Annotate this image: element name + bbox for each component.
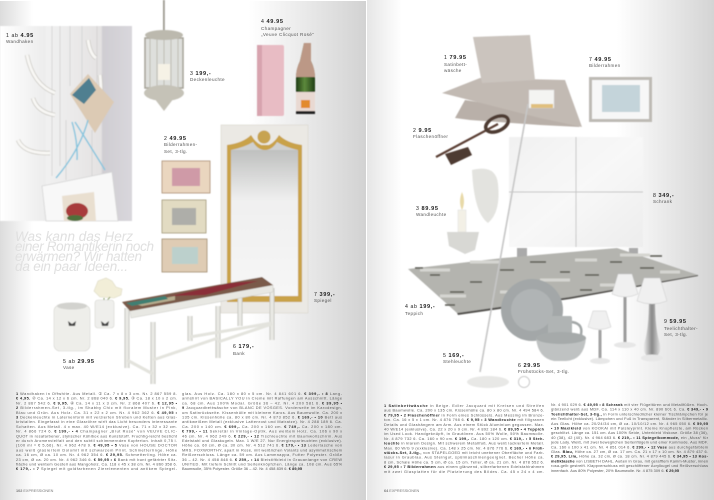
body text column 2: glas. Aus Holz. Ca. 180 x 80 x 5 cm. Nr. 4 841 601 6. € 399,- • 8 Lang-	[182, 392, 343, 396]
body text column 3: lasur in Graublau. Aus Steingut, spülmaschinengeeignet. Becher Höhe ca.	[384, 456, 544, 460]
product labels, right page: Satinbett-	[444, 62, 467, 67]
headline: Was kann das Herz	[15, 229, 133, 244]
label 7 right	[589, 57, 621, 68]
body text column 3: € 29,95 • 7 Bilderrahmen aus einem glänzend, silberfarbenen Edelstahlrahmen	[384, 465, 544, 469]
label 3: Deckenleuchte	[190, 77, 225, 82]
body text column 1: € 4,95. ② Ca. 14 x 12 x 6 cm. Nr. 2 868 040 6. € 9,95. ③ Ca. 18 x 10 x 2 cm.	[16, 397, 177, 401]
headline: einer Romantikerin noch	[15, 239, 154, 254]
label 7	[314, 292, 335, 303]
label 1: 1 ab 4.95	[6, 33, 34, 39]
body text column 2: UNITED. Mit tiefem Schlitt und Seitenknöpfchen. Länge ca. 108 cm. Aus 65%	[182, 462, 343, 466]
body text column 3: stücks-Set, 3-tlg., von STAPELGOED mit leicht unebener Oberfläche und Farb-	[384, 451, 545, 455]
label 2	[164, 136, 198, 154]
page number left: 102 EXPRESSIONEN	[16, 489, 54, 493]
body text column 1: aus weiß glasiertem Dolomit mit schwarzem Print. Schmetterlinge. Höhe	[16, 448, 177, 452]
icon: lamp energy badge	[518, 376, 530, 388]
body text column 1: ca. 16 cm, Ø ca. 10 cm. Nr. 4 962 354 6. € 29,95. Schmetterling. Höhe ca.	[16, 453, 177, 457]
label 9 right: Teelichthalter-	[664, 326, 698, 331]
body text column 4: metiktasche von LISBETH DAHL. Außen in Grau, mit gerafftem Kamm-Muster, innen	[551, 459, 708, 463]
body text column 4: Glas. Blau, Höhe ca. 27 cm, Ø ca. 17 cm. Ca. 21 x 17 x 10 cm. Nr. 4 879 437 6.	[551, 450, 708, 454]
label 7 right: 7 49.95	[589, 57, 612, 63]
photo: wall hooks	[0, 26, 132, 221]
body text column 2: € 799,- • 11 Sekretär in Vintage-Optik. Aus weißem Holz. Ca. 106 x 90 x	[182, 430, 342, 434]
body text column 1: (100 ml = € 5,66). Nr. 4 962 478 9. € 49,95 • 5 Vase von HOUSE DOCTOR	[16, 444, 177, 448]
label 5	[63, 359, 95, 370]
page number right: 64 EXPRESSIONEN	[384, 489, 420, 493]
label 6	[233, 344, 254, 356]
body text column 4	[550, 403, 709, 473]
body text column 2: um Satinrückseite. Kissenhülle mit kleinem Karos. Aus Baumwolle. Ca. 200 x	[182, 411, 342, 415]
label 5 right	[443, 353, 471, 364]
label 2: Set, 3-tlg.	[164, 149, 188, 154]
right page background	[367, 0, 714, 500]
label 4: 4 49.95	[261, 19, 284, 25]
body text column 4: Nr. 4 901 029 6. € 49,95 • 8 Schrank mit vier Flügeltüren und Metallfüßen. Hoch-	[551, 403, 709, 407]
headline: erwärmen? Wir hatten	[15, 249, 142, 264]
body text column 1	[16, 392, 178, 471]
body text column 2: Reißverschluss. Länge ca. 59 cm. Aus Lammnappa, Futter Polyester. Größe	[182, 453, 342, 457]
label 2: Bilderrahmen-	[164, 142, 198, 147]
body text column 2: armshirt von BASICALLY YOU in Creme mit Raffungen am Ausschnitt. Länge	[182, 397, 342, 401]
label 9 right: 9 59.95	[664, 319, 687, 325]
product labels, right page: wäsche	[444, 68, 462, 73]
body text column 1: 1 Wandhaken in Offwhite. Aus Metall. ① Ca. 7 x 8 x 3 cm. Nr. 2 867 559 8.	[16, 392, 177, 396]
product labels, right page: 1 79.95	[444, 55, 467, 61]
label 3 right: 3 89.95	[416, 206, 439, 212]
body text column 2: Baumwolle, 35% Polyester. Größe 36 – 42. Nr. 4 458 839 6. € 89,95	[182, 467, 303, 471]
cabinet	[509, 137, 643, 258]
mirror	[221, 125, 308, 313]
body text column 1: Nr. 4 866 724 6. € 199,- • 4 Champagner „Brut Rosé“ von VEUVE CLIC-	[16, 430, 178, 434]
label 1: Wandhaken	[6, 39, 34, 44]
label 5 right: 5 169,-	[443, 353, 464, 359]
body text column 2: Ca. 200 x 140 cm. € 699,- Ca. 200 x 160 cm. € 749,- Ca. 200 x 180 cm.	[182, 425, 342, 429]
left page background	[0, 1, 366, 500]
body text column 2: Höhe ca. 60 cm, Ø ca. 30 cm. Nr. 4 512 741 6. € 179,- • 13 Ledertasche von	[182, 444, 342, 448]
label 4 right: Teppich	[405, 311, 423, 316]
label 4	[261, 19, 314, 37]
body text column 3: 8 cm, Schale Höhe ca. 5 cm, Ø ca. 15 cm. Teller, Ø ca. 21 cm. Nr. 4 878 552 6.	[384, 460, 544, 464]
body text column 3: Max. 60 W/G 9 (exklusive). Ca. 148 x 25 cm. Nr. 4 876 776 6. € 169,- • 6 Früh-	[384, 446, 545, 450]
vases	[54, 278, 122, 351]
rug	[408, 248, 698, 315]
label 8 right	[653, 193, 674, 204]
body text column 2: MRS. FOXWORTHY, apart in Rosé, mit weißlichen Volants und asymmetrischem	[182, 448, 342, 452]
key bottle opener	[436, 113, 511, 165]
body text column 4: innenfach. Aus 80% Polyester, 20% Baumwolle. Nr. 4 875 309 6. € 29,95	[551, 469, 680, 473]
tealight holders	[588, 274, 667, 364]
body text column 2: 9 Jacquardbettwäsche von BLANC DE VOSGES. Vorderseite im Karodesign,	[182, 406, 342, 410]
body text column 3	[384, 404, 545, 474]
bench	[122, 277, 273, 384]
headline: da ein paar Ideen...	[15, 259, 128, 274]
label 4: Champagner	[261, 26, 291, 31]
body text column 1: Nr. 2 867 542 6. € 9,95. ④ Ca. 14 x 11 x 3 cm. Nr. 2 868 407 6. € 12,95 •	[16, 401, 178, 405]
label 9 right	[664, 319, 698, 337]
body text column 4: Ca. 160 x 100 x 41 cm. Nr. 4 851 014 6. € 299,- • 12 Vase aus durchgefärbtem	[551, 445, 708, 449]
body text column 3: im Used Look. Handgeknüpft, in Grautönen. Aus 50% Wolle, 50% Baumwolle.	[384, 432, 544, 436]
body text column 1: er durch Aromenvielfalt und den subtil schimmernden Kupferton. Inhalt 0,75 l.	[16, 439, 177, 443]
label 8 right: 8 349,-	[653, 193, 674, 199]
body text column 4: geschlitzt. Länge ca. 151 cm. Aus 100% Seide, Unterkleid Viskose. Größe 38 (36),	[551, 431, 708, 435]
body text column 2: ca. 68 cm. Aus 100% Modal. Größe 36 – 42. Nr. 4 200 581 6. € 39,95 •	[182, 401, 343, 405]
body text column 4: • 10 Maxikleid von KOOKAI mit Paisleyprint. Kleine Knopfleiste, am Rücken	[551, 426, 708, 430]
body text column 1: 23 cm, Ø ca. 20 cm. Nr. 4 962 346 6. € 59,95 • 6 Bank mit bunt gefärbter Sitz-	[16, 458, 178, 462]
wall light	[447, 169, 499, 254]
body text column 1: Schatten. Aus Metall. 4 x max. 40 W/E14 (exklusive). Ca. 71 x 32 x 32 cm.	[16, 425, 177, 429]
body text column 4: rosa-gelb gestreift. Klappverschluss mit geschliffener Acrylkugel und Reißverschluss	[551, 464, 708, 468]
label 6: 6 179,-	[233, 344, 254, 350]
label 2 right: Flaschenöffner	[413, 134, 448, 139]
body text column 1: kristallen. Eingefasst in eine Glasröhre wirft das Licht besonders interessante	[16, 420, 177, 424]
label 5: Vase	[63, 365, 75, 370]
body text column 4: Aus Glas. Höhe ca. 20/24/34 cm, Ø ca. 10/10/12 cm. Nr. 4 965 050 6. € 59,95	[551, 422, 709, 426]
body text column 4: glänzend weiß aus MDF. Ca. 114 x 110 x 40 cm. Nr. 890 601 6. Ca. € 349,- • 9	[551, 408, 708, 412]
body text column 2: 36 – 42. Nr. 4 458 848 6. € 259,- • 14 Bleistiftkleid in Grauanlange von CREW	[182, 458, 342, 462]
label 3 right	[416, 206, 447, 217]
floor lamp	[467, 90, 554, 388]
label 5: 5 ab 29.95	[63, 359, 95, 365]
product labels, right page	[444, 55, 467, 73]
label 7: 7 399,-	[314, 292, 335, 298]
picture frames	[162, 161, 210, 272]
body text column 1: 3 Deckenleuchte in Laternenform mit verzierten Streben und Ketten aus Glas-	[16, 416, 178, 420]
champagne box and bottle	[257, 43, 315, 116]
body text column 4: ein Teelicht (exklusive). Lämpchen und Fuß in Transparent, Ständer in Silbermetallic.	[551, 417, 708, 421]
body text column 4: Teelichthalter-Set, 3-tlg., in Form unterschiedlicher kleiner Tischlämpchen für je	[551, 412, 708, 416]
body text column 2: antikweißem Metall (exklusive Lattenrost und Matratze). Nr. 4 288 189 6. Ca.	[182, 420, 342, 424]
body text column 2: Edelstahl und Glaskugeln. Max. 1 W/E 27. Nur Energiesparleuchten (exklusive).	[182, 439, 342, 443]
label 2 right: 2 9.95	[413, 128, 432, 134]
picture frame on wall	[589, 77, 652, 122]
body text column 2: 135 cm. Kissenhülle ca. 80 x 80 cm. Nr. 4 873 852 6. € 169,- • 10 Bett aus	[182, 416, 342, 420]
body text column 4: 40 (38), 42 (40). Nr. 4 964 683 6. € 219,- • 11 Spiegelkommode, ein „Muss“ für	[551, 436, 709, 440]
body text column 3: 1 Satinbettwäsche in Beige. Edler Jacquard mit Kreisen und Streifen	[384, 404, 544, 408]
body text column 2	[182, 392, 343, 471]
label 7 right: Bilderrahmen	[589, 63, 621, 68]
label 8 right: Schrank	[653, 199, 673, 204]
body text column 3: leuchte in klarem Design. Mit schwerem Metallfuß. Aus weiß lackiertem Metall.	[384, 442, 544, 446]
body text column 1: 2 Bilderrahmen-Set, 3-tlg., im Shabby Chic mit floralem Muster in Pink,	[16, 406, 177, 410]
label 7: Spiegel	[314, 298, 332, 303]
body text column 3: mit zwei Glasplatten für die Platzierung des Bildes. Ca. 45 x 24 x 4 cm.	[384, 470, 544, 474]
label 4 right	[405, 304, 435, 316]
label 4: „Veuve Clicquot Rosé“	[261, 32, 314, 37]
body text column 1: Blau und Grün. Aus Holz. Ca. 31 x 22 x 2 cm. Nr. 4 962 362 6. € 49,95 •	[16, 411, 178, 415]
body text column 2: 46 cm. Nr. 4 962 249 6. € 229,- • 12 Tischleuchte mit Baumwollschirm. Aus	[182, 434, 342, 438]
label 3 right: Wandleuchte	[416, 212, 447, 217]
label 9 right: Set, 3-tlg.	[664, 332, 688, 337]
label 2 right	[413, 128, 448, 139]
body text column 3: 40 W/E14 (exklusive). Ca. 22 x 20 x 9 cm. Nr. 4 892 184 6. € 89,95 • 4 Teppich	[384, 428, 545, 432]
label 3	[190, 71, 225, 82]
label 1	[6, 33, 34, 44]
chandelier	[144, 0, 184, 111]
label 6 right	[518, 363, 569, 374]
label 6: Bank	[233, 351, 245, 356]
label 6 right: Frühstücks-Set, 3-tlg.	[518, 369, 569, 374]
bedding	[442, 35, 582, 127]
body text column 3: Nr. 4 879 732 6. Ca. 160 x 90 cm. € 199,- Ca. 180 x 120 cm. € 319,- • 5 Steh-	[384, 437, 545, 441]
breakfast set	[501, 279, 586, 361]
body text column 4: jede Lady. Weiß, mit zwei beweglichen Seitenflügeln und einer Kommode. Aus MDF.	[550, 441, 708, 445]
body text column 3: € 79,95 • 2 Flaschenöffner in Form eines Schlüssels. Aus Messing im Bronze-	[384, 413, 545, 417]
body text column 1: fläche und weißem Gestell aus Mangoholz. Ca. 118 x 45 x 38 cm. Nr. 4 860 358 6.	[16, 462, 177, 466]
label 3: 3 199,-	[190, 71, 211, 77]
label 2: 2 49.95	[164, 136, 187, 142]
label 6 right: 6 29.95	[518, 363, 541, 369]
headline	[15, 229, 154, 274]
body text column 1: QUOT in rosafarbener, stylischer Kühlbox aus Kunststoff. Fruchtig-leicht besticht	[16, 434, 178, 438]
body text column 3: Details und Glashängern am Arm. Aus einem Stück Aluminium gegossen. Max.	[384, 423, 544, 427]
body text column 4: € 29,95. Lila, Höhe ca. 32 cm, Ø ca. 18 cm. Nr. 4 879 445 6. € 34,95 • 13 Kos-	[551, 455, 709, 459]
label 4 right: 4 ab 199,-	[405, 304, 435, 310]
body text column 3: aus Baumwolle. Ca. 200 x 135 cm. Kissenhülle ca. 80 x 80 cm. Nr. 4 494 584 6.	[384, 409, 544, 413]
body text column 3: ton. Ca. 16 x 5 x 1 cm. Nr. 4 876 798 6. € 9,95 • 3 Wandleuchte mit filigranen	[384, 418, 544, 422]
label 5 right: Stehleuchte	[443, 359, 471, 364]
body text column 1: € 179,- • 7 Spiegel mit goldfarbenen Zierelementen und antikem Spiegel-	[16, 467, 178, 471]
